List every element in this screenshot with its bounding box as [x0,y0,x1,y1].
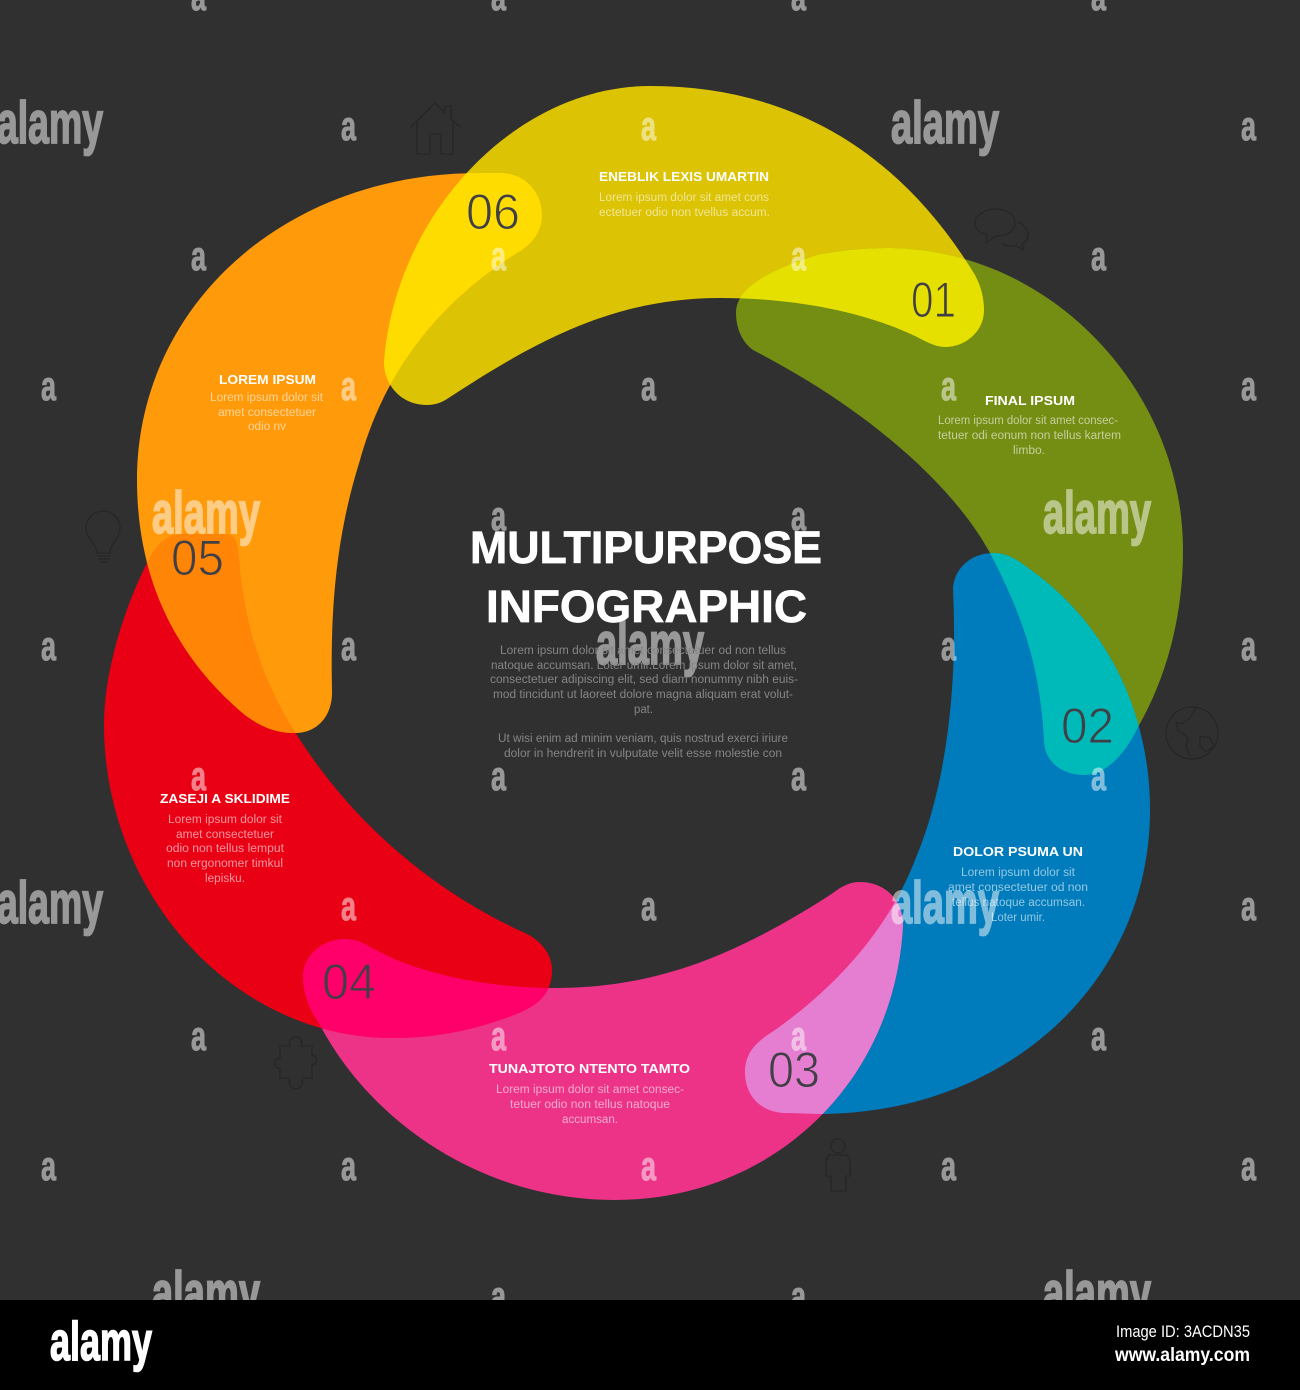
panel: segment 04 pink [303,882,903,1200]
text block: pink segment: Lorem ipsum dolor sit amet consec- [496,1084,684,1096]
text block: blue segment: DOLOR PSUMA UN [953,844,1083,859]
icon: person [826,1139,850,1191]
watermark pattern: a [1091,1013,1107,1059]
watermark pattern: a [941,1143,957,1189]
watermark pattern: alamy [0,90,103,156]
watermark pattern: a [41,1143,57,1189]
title [470,522,822,632]
text block: green segment: Lorem ipsum dolor sit amet consec- [938,415,1118,427]
text block: orange segment: amet consectetuer [218,407,316,419]
watermark pattern: a [191,753,207,799]
text block: yellow segment [599,169,770,219]
text block: blue segment: amet consectetuer od non [948,882,1088,894]
center body text: dolor in hendrerit in vulputate velit esse molestie con [504,748,782,760]
text block: red segment: lepisku. [205,873,245,885]
text block: yellow segment: ectetuer odio non tvellus accum. [599,207,770,219]
number 02: 02 [1061,698,1114,754]
watermark pattern: a [941,363,957,409]
panel: segment 02 green [736,248,1183,775]
panel: segment 06 orange [137,173,542,733]
center body text: pat. [634,704,653,716]
watermark pattern: a [1241,103,1257,149]
panel: segment 01 yellow [384,86,984,405]
website: www.alamy.com [1114,1345,1250,1366]
icon: house [411,103,460,154]
center body text: consectetuer adipiscing elit, sed diam nonummy nibh euis- [490,674,798,686]
overlap: green and blue [990,553,1139,775]
footer bar [0,1300,1300,1390]
watermark pattern: a [41,623,57,669]
watermark pattern: a [341,883,357,929]
icon: puzzle piece [275,1037,316,1089]
text block: blue segment: tellus natoque accumsan. [952,897,1085,909]
watermark pattern: a [791,753,807,799]
text block: pink segment: tetuer odio non tellus natoque [510,1099,670,1111]
watermark pattern: alamy [152,480,260,546]
watermark pattern: alamy [1043,480,1151,546]
overlap: red and orange [147,534,296,733]
watermark pattern: a [341,103,357,149]
text block: yellow segment: ENEBLIK LEXIS UMARTIN [599,169,769,184]
watermark pattern: a [641,103,657,149]
icon: light bulb [86,511,120,562]
text block: green segment: FINAL IPSUM [985,393,1075,408]
title: INFOGRAPHIC [486,581,807,632]
text block: orange segment: odio nv [248,421,286,433]
watermark pattern: alamy [1043,1260,1151,1326]
text block: green segment: tetuer odi eonum non tellus kartem [938,430,1121,442]
text block: orange segment [210,372,324,433]
watermark pattern: alamy [891,870,999,936]
watermark pattern: a [1241,1143,1257,1189]
text block: red segment: amet consectetuer [176,829,274,841]
watermark pattern: a [641,363,657,409]
text block: blue segment [948,844,1088,924]
watermark pattern: a [1241,883,1257,929]
image id: Image ID: 3ACDN35 [1116,1322,1250,1341]
watermark pattern: a [491,1013,507,1059]
watermark pattern: alamy [596,611,704,677]
number 06: 06 [466,184,520,240]
center body text [490,645,798,760]
watermark pattern: a [791,1013,807,1059]
watermark pattern: a [791,1273,807,1319]
watermark pattern: a [191,1013,207,1059]
text block: green segment [938,393,1121,457]
icon: globe [1166,707,1218,759]
watermark pattern: alamy [891,90,999,156]
watermark pattern: a [1091,233,1107,279]
text block: red segment: non ergonomer timkul [167,858,283,870]
text block: red segment: Lorem ipsum dolor sit [168,814,283,826]
number 01: 01 [911,272,956,328]
footer logo: alamy [50,1310,152,1372]
icon: speech bubbles [975,209,1028,250]
watermark pattern: a [341,623,357,669]
text block: orange segment: Lorem ipsum dolor sit [210,392,324,404]
text block: blue segment: Loter umir. [991,912,1045,924]
watermark pattern: a [1241,623,1257,669]
watermark pattern: a [1091,753,1107,799]
watermark pattern: a [791,493,807,539]
panel: segment 05 red [104,534,552,1038]
text block: orange segment: LOREM IPSUM [219,372,316,387]
watermark pattern: a [791,233,807,279]
center body text: Ut wisi enim ad minim veniam, quis nostrud exerci iriure [498,733,788,745]
text block: blue segment: Lorem ipsum dolor sit [961,867,1076,879]
watermark pattern: a [491,493,507,539]
watermark pattern: a [941,623,957,669]
title: MULTIPURPOSE [470,522,822,573]
watermark pattern: a [641,883,657,929]
center body text: natoque accumsan. Loter umir.Lorem ipsum dolor sit amet, [491,660,797,672]
overlap: pink and red [303,939,548,1038]
watermark pattern: a [341,363,357,409]
watermark pattern: a [341,1143,357,1189]
watermark pattern: a [41,363,57,409]
number 03: 03 [768,1042,820,1098]
watermark pattern: a [491,753,507,799]
text block: pink segment: TUNAJTOTO NTENTO TAMTO [489,1061,690,1076]
watermark pattern: a [191,233,207,279]
text block: red segment: odio non tellus lemput [166,843,285,855]
watermark pattern: a [641,1143,657,1189]
text block: yellow segment: Lorem ipsum dolor sit amet cons [599,192,769,204]
number 04: 04 [322,954,376,1010]
watermark pattern: a [491,233,507,279]
text block: pink segment [489,1061,690,1126]
watermark pattern: a [1241,363,1257,409]
panel: segment 03 blue [745,553,1150,1114]
watermark pattern: alamy [0,870,103,936]
watermark pattern: a [491,1273,507,1319]
center body text: Lorem ipsum dolor sit amet consectetuer od non tellus [500,645,786,657]
overlap: blue and pink [745,900,903,1114]
text block: green segment: limbo. [1013,445,1045,457]
text block: red segment: ZASEJI A SKLIDIME [160,791,290,806]
number 05: 05 [171,530,224,586]
overlap: yellow and orange [384,173,542,385]
overlap: yellow and green [740,248,984,347]
text block: pink segment: accumsan. [562,1114,618,1126]
center body text: mod tincidunt ut laoreet dolore magna aliquam erat volut- [493,689,793,701]
watermark pattern: alamy [152,1260,260,1326]
text block: red segment [160,791,290,885]
